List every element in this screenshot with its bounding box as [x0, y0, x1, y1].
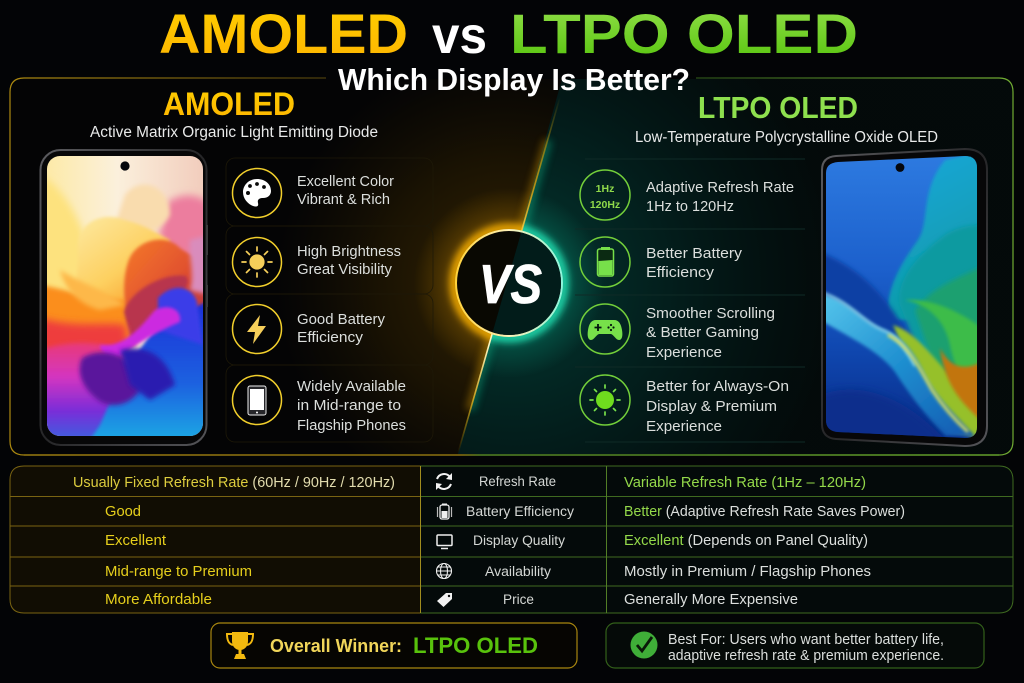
row: adaptive refresh: Adaptive Refresh Rate [646, 179, 794, 196]
icon: refresh badge: 120Hz [590, 199, 620, 211]
AMOLED heading: AMOLED [163, 86, 295, 122]
column: AMOLED values: Usually Fixed Refresh Rate (60Hz / 90Hz / 120Hz) [73, 475, 395, 491]
icon: palette [232, 168, 282, 218]
column: LTPO values: Variable Refresh Rate (1Hz – 120Hz) [624, 475, 866, 491]
diagonal beam [458, 97, 560, 453]
row: high brightness: High Brightness [297, 243, 401, 260]
row: good battery [226, 294, 433, 365]
diagonal split background [11, 79, 1012, 454]
title: vs [432, 7, 487, 65]
callout: overall winner [211, 623, 577, 668]
column: AMOLED values: Excellent [105, 533, 166, 549]
row: smoother scrolling [580, 304, 775, 361]
row: always-on: Display & Premium [646, 398, 777, 415]
row: widely available: Flagship Phones [297, 417, 406, 434]
row: adaptive refresh: 1Hz to 120Hz [646, 198, 734, 215]
list: LTPO features [575, 159, 805, 442]
row: adaptive refresh [580, 170, 794, 220]
icon: refresh [436, 473, 452, 490]
column: AMOLED values: Mid-range to Premium [105, 564, 252, 580]
icon: refresh badge [580, 170, 630, 220]
column: criteria: Display Quality [473, 533, 565, 548]
column: AMOLED values [73, 475, 395, 608]
icon: smartphone [232, 376, 282, 424]
column: criteria: Refresh Rate [479, 474, 556, 489]
panel border [10, 78, 1013, 455]
row: better battery: Better Battery [646, 245, 743, 262]
phone: LTPO [820, 149, 987, 446]
title: AMOLED [159, 2, 408, 65]
row: widely available: Widely Available [297, 378, 406, 395]
row: high brightness: Great Visibility [297, 261, 392, 278]
camera [896, 163, 904, 172]
icon: battery [580, 237, 630, 287]
row: better battery: Efficiency [646, 264, 715, 281]
icon: sun [232, 238, 282, 286]
row: smoother scrolling: Experience [646, 344, 722, 361]
row: good battery: Efficiency [297, 329, 364, 346]
camera [120, 161, 130, 171]
callout: best for: Best For: Users who want better battery life, [668, 632, 944, 648]
row: widely available: in Mid-range to [297, 397, 401, 414]
row: smoother scrolling: Smoother Scrolling [646, 305, 775, 322]
column: AMOLED values: More Affordable [105, 592, 212, 608]
column: AMOLED values: Good [105, 504, 141, 520]
row: excellent color: Excellent Color [297, 173, 394, 190]
LTPO full name: Low-Temperature Polycrystalline Oxide OLED [635, 129, 938, 146]
column: criteria: Battery Efficiency [466, 504, 574, 519]
teal soft glow [470, 137, 595, 414]
icon: game controller [580, 304, 630, 354]
row separators [575, 159, 805, 442]
list: AMOLED features [226, 158, 433, 442]
column: LTPO values: Mostly in Premium / Flagship Phones [624, 564, 871, 580]
row: excellent color [226, 158, 433, 226]
icon: green sun [580, 375, 630, 425]
row: better battery [580, 237, 743, 287]
gold soft glow [420, 136, 548, 414]
icon: lightning bolt [232, 304, 282, 354]
column: LTPO values: Excellent (Depends on Panel Quality) [624, 533, 868, 549]
phone: AMOLED [40, 150, 210, 445]
LTPO heading: LTPO OLED [698, 90, 858, 125]
row: high brightness [226, 226, 433, 294]
row: excellent color: Vibrant & Rich [297, 191, 390, 208]
callout: best for [606, 623, 984, 668]
title [159, 2, 858, 65]
callout: overall winner: LTPO OLED [413, 633, 538, 658]
icon: battery outline [438, 504, 452, 519]
column: LTPO values [624, 475, 905, 608]
VS label: VS [479, 253, 542, 315]
icon: price tag [437, 593, 452, 607]
row: good battery: Good Battery [297, 311, 385, 328]
badge circle [456, 230, 562, 336]
column: LTPO values: Generally More Expensive [624, 592, 798, 608]
table grid [10, 466, 1013, 613]
icon: trophy [227, 632, 253, 659]
subtitle: Which Display Is Better? [338, 62, 690, 97]
column: criteria [436, 473, 574, 607]
title: LTPO OLED [510, 2, 858, 65]
divider beam and VS badge [414, 97, 604, 453]
comparison table [10, 466, 1013, 613]
row: always-on [580, 375, 789, 435]
column: LTPO values: Better (Adaptive Refresh Rate Saves Power) [624, 504, 905, 520]
row: always-on: Experience [646, 418, 722, 435]
column: criteria: Price [503, 592, 534, 607]
table cell backgrounds [10, 466, 1013, 613]
row: smoother scrolling: & Better Gaming [646, 324, 759, 341]
row: always-on: Better for Always-On [646, 378, 789, 395]
panel: comparison hero [10, 78, 1013, 455]
wallpaper: cool waves [826, 156, 977, 438]
icon: check badge [630, 632, 658, 658]
callout: best for: adaptive refresh rate & premium experience. [668, 648, 944, 664]
icon: monitor [437, 535, 452, 548]
icon: refresh badge: 1Hz [596, 183, 614, 195]
row: widely available [226, 365, 433, 442]
column: criteria: Availability [485, 564, 551, 579]
icon: globe [436, 564, 452, 578]
AMOLED full name: Active Matrix Organic Light Emitting Diode [90, 124, 378, 141]
wallpaper: warm swirl [40, 156, 210, 440]
callout: overall winner: Overall Winner: [270, 636, 402, 656]
